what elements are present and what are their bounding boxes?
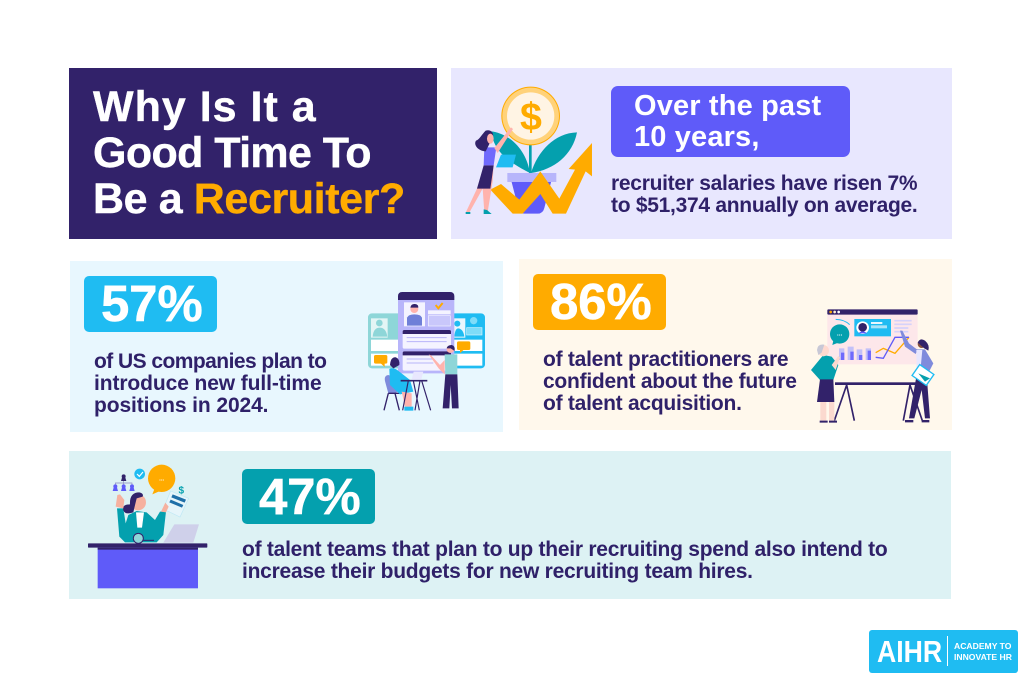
panel: 47% [69,451,951,599]
presenter [900,331,918,354]
desk [401,378,427,383]
panel: 57% [70,261,503,432]
logo tagline: ACADEMY TO [954,641,1011,651]
heading: Why Is It a [93,83,317,131]
icon: woman at desk [88,465,207,588]
icon: woman with money plant: $ [520,95,542,139]
heading: Be a Recruiter? [93,175,405,223]
profile card [854,319,891,336]
text: 86% [543,348,797,415]
magnifier [133,533,143,543]
speech bubble [830,324,849,344]
logo tagline [954,641,1012,662]
text: 86%: of talent acquisition. [543,392,742,415]
panel: salaries [451,68,952,239]
heading: Good Time To [93,129,371,177]
laptop [163,524,199,543]
text: 57%: introduce new full-time [94,372,322,395]
icon: woman at desk: ... [159,476,164,482]
logo tagline: INNOVATE HR [954,652,1012,662]
icon: woman with money plant [466,87,592,214]
arrow [490,143,592,214]
woman [117,508,166,542]
speech bubble [148,465,175,492]
older woman [811,355,838,380]
side card left [368,313,408,368]
board [827,309,918,364]
icon: presentation board [811,309,934,423]
text: 86%: confident about the future [543,370,797,393]
main card [398,292,454,373]
icon: woman at desk: $ [179,486,185,497]
icon: resume review [368,292,485,411]
woman [466,165,494,212]
man [429,354,445,374]
logo: AIHR [869,630,1018,673]
coin [501,87,560,145]
panel: 86% [519,259,952,430]
callout: over the past 10 years: Over the past [634,90,821,122]
text: 57%: positions in 2024. [94,394,268,417]
logo divider [947,636,948,666]
callout: over the past 10 years [611,86,850,157]
speech bubbles [374,355,387,364]
text: 86%: of talent practitioners are [543,348,788,371]
stat: 47%: 47% [259,468,360,525]
text: salaries: recruiter salaries have risen 7% [611,172,917,195]
icon: presentation board: ... [837,331,843,338]
text: salaries: to $51,374 annually on average. [611,194,917,217]
leaves [491,131,530,173]
heading [92,83,405,223]
text: 47% [242,538,887,583]
side card right [443,313,485,368]
org chart [115,480,132,486]
callout: over the past 10 years: 10 years, [634,121,760,153]
text: 57% [94,350,326,417]
desk [88,543,207,548]
check badge [134,469,145,479]
easel [835,382,922,385]
text: 57%: of US companies plan to [94,350,326,373]
stat: 86%: 86% [550,273,651,330]
woman at desk [385,375,397,393]
text: salaries [611,172,917,217]
stat: 57%: 57% [101,275,202,332]
text: 47%: of talent teams that plan to up their recruiting spend also intend to [242,538,887,561]
pot [511,180,552,214]
document [163,491,189,517]
text: 47%: increase their budgets for new recruiting team hires. [242,560,753,583]
panel: title [69,68,437,239]
logo wordmark: AIHR [877,634,942,669]
lines [876,337,909,353]
bars [839,347,871,360]
